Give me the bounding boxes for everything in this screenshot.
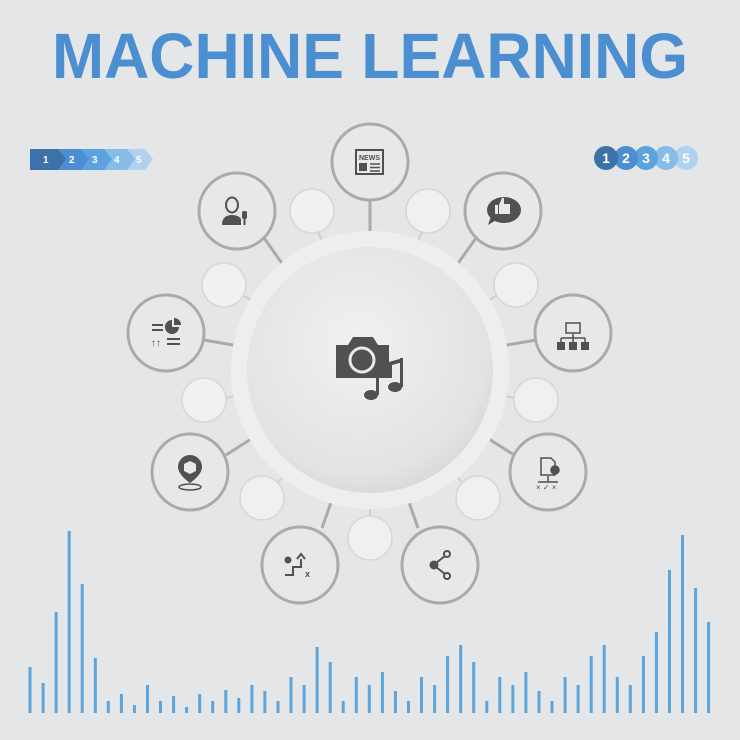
circle steps 1-5: 2 <box>622 150 630 166</box>
arrow steps 1-5: 4 <box>114 155 120 166</box>
circle steps 1-5: 4 <box>662 150 670 166</box>
arrow steps 1-5 <box>30 149 153 170</box>
center circle <box>247 247 493 493</box>
circle steps 1-5: 5 <box>682 150 690 166</box>
connector lines <box>204 200 536 528</box>
circle steps 1-5: 3 <box>642 150 650 166</box>
icon: news <box>356 150 383 174</box>
arrow steps 1-5: 5 <box>136 155 142 166</box>
icon: document check <box>536 458 559 492</box>
circle steps 1-5 <box>594 146 698 170</box>
icon: steps <box>285 554 310 579</box>
circle steps 1-5: 1 <box>602 150 610 166</box>
icon: news: NEWS <box>359 155 380 162</box>
bar chart <box>30 531 709 713</box>
icon: share <box>430 551 450 579</box>
small empty circles <box>182 189 558 560</box>
icon: person with microphone <box>222 198 247 225</box>
icon: hierarchy media <box>557 323 589 350</box>
icon: box location <box>178 455 202 490</box>
icon: list with chart: ↑↑ <box>151 338 161 349</box>
icon: thumbs up bubble <box>487 197 521 225</box>
title: MACHINE LEARNING <box>52 20 688 92</box>
center ring <box>231 231 509 509</box>
icon: camera with music notes <box>336 337 403 400</box>
icon: steps: x <box>305 569 310 579</box>
arrow steps 1-5: 1 <box>43 155 49 166</box>
arrow steps 1-5: 3 <box>92 155 98 166</box>
icon: list with chart <box>151 318 181 349</box>
arrow steps 1-5: 2 <box>69 155 75 166</box>
icon: document check: × ✓ × <box>536 483 557 492</box>
icon circles <box>128 124 611 603</box>
